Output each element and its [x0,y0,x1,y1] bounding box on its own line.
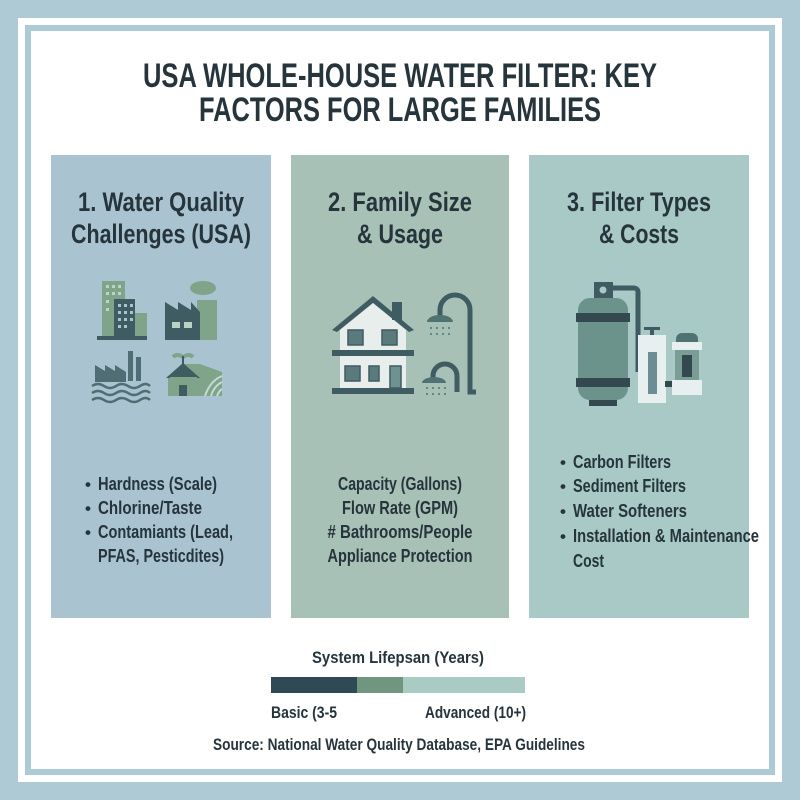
icon: city buildings [97,281,147,340]
source note: Source: National Water Quality Database, EPA Guidelines [213,735,585,754]
heading: water quality: Challenges (USA) [71,219,251,249]
icon: showers [422,295,476,395]
text: water quality bullets: Hardness (Scale) [98,474,217,494]
text: filter types bullets: • [560,477,566,496]
text: water quality bullets: • [85,523,91,542]
title: FACTORS FOR LARGE FAMILIES [199,91,601,129]
text: family size items: Capacity (Gallons) [338,474,462,494]
text: family size items: # Bathrooms/People [328,522,472,542]
heading: filter types: 3. Filter Types [567,187,711,217]
text: filter types bullets: • [560,502,566,521]
text: filter types bullets: Sediment Filters [573,476,686,496]
text: water quality bullets: Chlorine/Taste [98,498,202,518]
icon: house [332,296,414,394]
text: water quality bullets [85,474,233,566]
text: water quality bullets: PFAS, Pesticdites) [98,546,224,566]
panel: water quality [51,155,271,618]
text: filter types bullets: • [560,527,566,546]
icon: farm [166,355,222,396]
scale labels: Basic (3-5 [271,703,337,722]
heading: filter types [567,187,711,249]
scale title: System Lifepsan (Years) [312,648,484,667]
icon: factory water [92,351,150,402]
text: family size items: Flow Rate (GPM) [342,498,458,518]
heading: water quality [71,187,251,249]
text: family size items: Appliance Protection [328,546,472,566]
icon: filter tank and cartridges [576,282,702,406]
scale labels: Advanced (10+) [425,703,526,722]
heading: water quality: 1. Water Quality [78,187,244,217]
scale labels [271,703,526,722]
text: water quality bullets: • [85,499,91,518]
icon: factory smoke [165,281,217,340]
text: filter types bullets: Carbon Filters [573,452,671,472]
text: filter types bullets [560,452,759,571]
text: water quality bullets: Contamiants (Lead, [98,522,233,542]
text: water quality bullets: • [85,475,91,494]
text: filter types bullets: Installation & Maintenance [573,526,759,546]
heading: family size: & Usage [357,219,443,249]
panel: family size [291,155,509,618]
text: family size items [328,474,472,566]
text: filter types bullets: Water Softeners [573,501,687,521]
text: filter types bullets: Cost [573,551,604,571]
heading: family size [328,187,472,249]
title [143,57,657,129]
text: filter types bullets: • [560,453,566,472]
scale bar [271,677,525,693]
lifespan scale [271,648,526,722]
panel: filter types [529,155,759,618]
heading: family size: 2. Family Size [328,187,472,217]
heading: filter types: & Costs [599,219,679,249]
